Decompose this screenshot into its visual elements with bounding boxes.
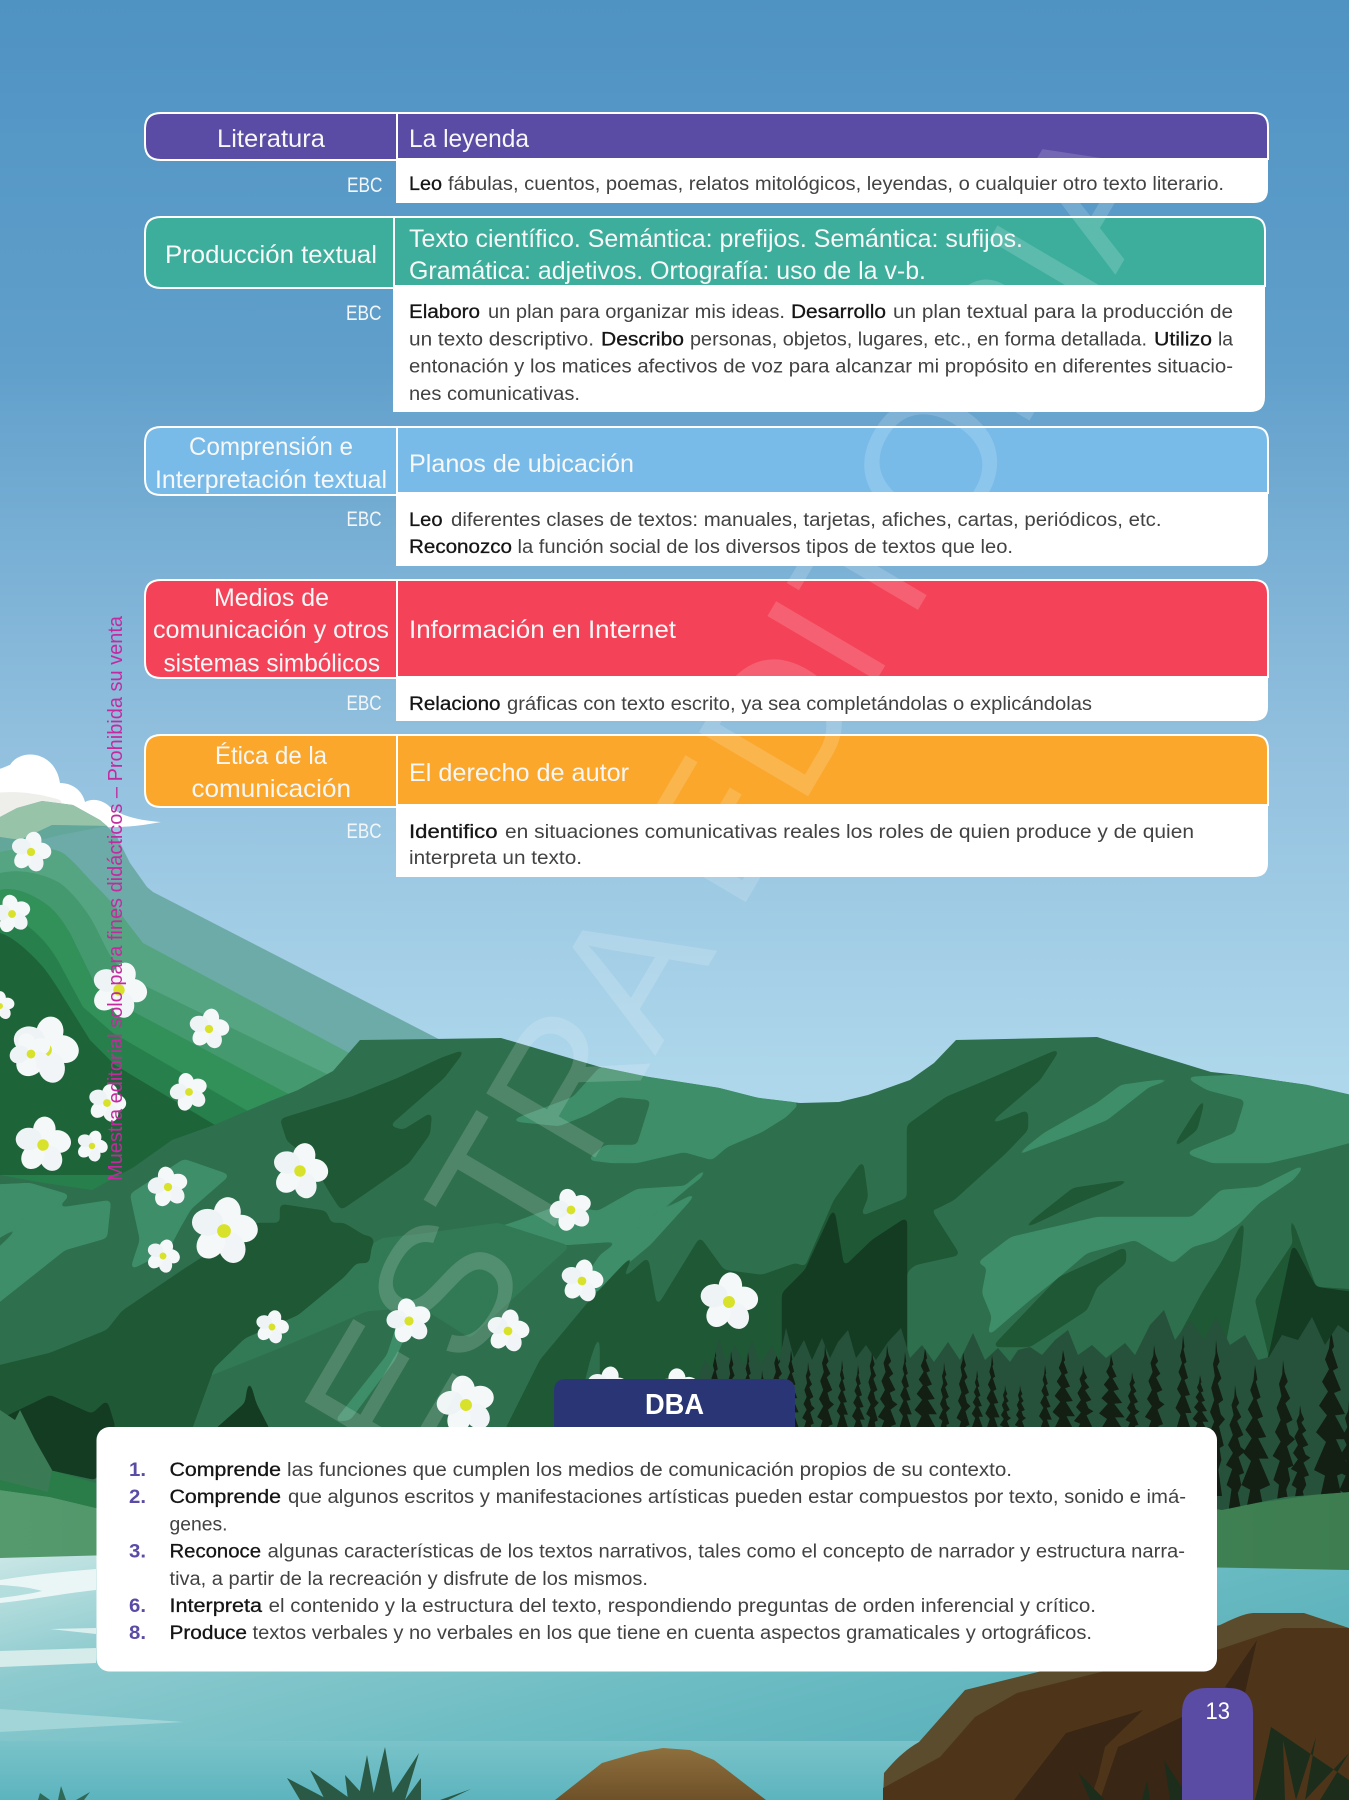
- text: Producción textual: [165, 225, 1233, 405]
- text: Medios de comunicación: EBC: [346, 692, 382, 715]
- text: Producción textual: nes comunicativas.: [409, 384, 580, 405]
- DBA item 1: 1.: [129, 1460, 146, 1481]
- text: Ética de la comunicación: Identifico: [409, 822, 498, 843]
- text: Medios de comunicación: [153, 584, 1092, 715]
- text: Producción textual: Desarrollo: [791, 302, 886, 323]
- text: Ética de la comunicación: EBC: [346, 820, 382, 843]
- text: Comprensión e Interpretación textual: Comprensión e: [189, 433, 353, 461]
- text: Comprensión e Interpretación textual: Leo: [409, 510, 442, 531]
- text: Producción textual: Gramática: adjetivos. Ortografía: uso de la v-b.: [409, 257, 926, 285]
- text: Medios de comunicación: Medios de: [214, 584, 329, 612]
- DBA tab: DBA: [645, 1389, 704, 1421]
- DBA item 8: Produce: [170, 1623, 247, 1644]
- DBA item 3: 3.: [129, 1542, 146, 1563]
- back mountain with layered green bands: [0, 801, 460, 1300]
- DBA item 2: genes.: [170, 1515, 228, 1536]
- text: Producción textual: Producción textual: [165, 241, 377, 269]
- watermark: ESTRA EDITORIA: [262, 84, 1211, 1499]
- white flowers on mountains: [0, 828, 762, 1440]
- cloud: [0, 754, 161, 845]
- DBA item 2: Comprende: [170, 1487, 281, 1508]
- text: Literatura: fábulas, cuentos, poemas, relatos mitológicos, leyendas, o cualquier otro texto literario.: [448, 174, 1224, 195]
- text: Producción textual: Utilizo: [1154, 330, 1212, 350]
- text: Medios de comunicación: gráficas con texto escrito, ya sea completándolas o explicándolas: [507, 694, 1092, 715]
- text: Producción textual: entonación y los matices afectivos de voz para alcanzar mi propósito en diferentes situacio-: [409, 357, 1233, 378]
- panel: Comprensión e Interpretación textual: [145, 427, 1268, 566]
- text: Producción textual: Elaboro: [409, 302, 480, 323]
- text: Comprensión e Interpretación textual: [155, 433, 1162, 558]
- rock right: [883, 1613, 1349, 1800]
- DBA panel: [96, 1427, 1217, 1672]
- DBA item 2: 2.: [129, 1487, 146, 1508]
- DBA item 3: algunas características de los textos narrativos, tales como el concepto de narrador y estructura narra-: [268, 1542, 1185, 1563]
- text: Comprensión e Interpretación textual: Interpretación textual: [155, 466, 387, 494]
- text: Literatura: Literatura: [217, 125, 325, 153]
- shore: [0, 1440, 1349, 1575]
- text: Literatura: La leyenda: [409, 125, 529, 153]
- front mountain range: [0, 1037, 1349, 1508]
- page number tab: [1182, 1688, 1253, 1800]
- DBA item 8: textos verbales y no verbales en los que tiene en cuenta aspectos gramaticales y ortográficos.: [252, 1623, 1092, 1644]
- page number tab: 13: [1206, 1698, 1230, 1725]
- text: Producción textual: un plan textual para la producción de: [893, 302, 1233, 323]
- text: Comprensión e Interpretación textual: Planos de ubicación: [409, 450, 634, 478]
- panel: Producción textual: [145, 217, 1265, 412]
- panel: Ética de la comunicación: [145, 735, 1268, 877]
- vertical notice: Muestra editorial solo para fines didácticos – Prohibida su venta: [104, 615, 127, 1181]
- lake water: [0, 1550, 1349, 1800]
- grass tufts: [38, 1727, 1349, 1800]
- DBA item 2: [129, 1487, 1186, 1536]
- DBA item 3: Reconoce: [170, 1542, 261, 1563]
- text: Comprensión e Interpretación textual: EBC: [346, 508, 382, 531]
- DBA item 6: 6.: [129, 1596, 146, 1617]
- text: Medios de comunicación: Información en Internet: [409, 616, 676, 644]
- text: Medios de comunicación: sistemas simbólicos: [164, 650, 380, 678]
- DBA item 1: Comprende: [170, 1460, 281, 1481]
- text: Ética de la comunicación: en situaciones comunicativas reales los roles de quien produce y de quien: [505, 822, 1194, 843]
- text: Medios de comunicación: Relaciono: [409, 694, 500, 715]
- text: Producción textual: la: [1218, 330, 1233, 350]
- DBA item 8: 8.: [129, 1623, 146, 1644]
- text: Comprensión e Interpretación textual: diferentes clases de textos: manuales, tarjetas, afiches, cartas, periódicos, etc.: [451, 510, 1162, 531]
- DBA item 3: [129, 1542, 1185, 1590]
- text: Producción textual: Texto científico. Semántica: prefijos. Semántica: sufijos.: [409, 225, 1023, 253]
- text: Comprensión e Interpretación textual: Reconozco: [409, 537, 512, 558]
- DBA item 2: que algunos escritos y manifestaciones artísticas pueden estar compuestos por texto, sonido e imá-: [288, 1487, 1186, 1508]
- text: Literatura: EBC: [347, 174, 382, 197]
- text: Literatura: [217, 125, 1224, 197]
- text: Comprensión e Interpretación textual: la función social de los diversos tipos de textos que leo.: [518, 537, 1013, 558]
- DBA item 6: Interpreta: [170, 1596, 262, 1617]
- DBA item 6: el contenido y la estructura del texto, respondiendo preguntas de orden inferencial y crítico.: [269, 1596, 1096, 1617]
- DBA tab: [554, 1379, 795, 1430]
- text: Producción textual: un plan para organizar mis ideas.: [488, 302, 785, 323]
- text: Medios de comunicación: comunicación y otros: [153, 616, 389, 644]
- text: Ética de la comunicación: El derecho de autor: [409, 759, 629, 787]
- panel: Literatura: [145, 113, 1268, 203]
- text: Ética de la comunicación: Ética de la: [215, 741, 327, 770]
- forest of pine trees: [690, 1310, 1349, 1521]
- DBA item 1: las funciones que cumplen los medios de comunicación propios de su contexto.: [287, 1460, 1012, 1481]
- DBA item 3: tiva, a partir de la recreación y disfrute de los mismos.: [170, 1569, 648, 1590]
- text: Producción textual: EBC: [346, 302, 382, 325]
- text: Ética de la comunicación: comunicación: [192, 775, 351, 803]
- text: Producción textual: personas, objetos, lugares, etc., en forma detallada.: [690, 330, 1147, 350]
- rock centre: [555, 1748, 766, 1800]
- text: Ética de la comunicación: interpreta un texto.: [409, 848, 582, 869]
- text: Literatura: Leo: [409, 174, 442, 195]
- text: Producción textual: Describo: [601, 330, 684, 350]
- panel: Medios de comunicación: [145, 580, 1268, 721]
- text: Ética de la comunicación: [192, 741, 1194, 869]
- text: Producción textual: un texto descriptivo.: [409, 330, 594, 350]
